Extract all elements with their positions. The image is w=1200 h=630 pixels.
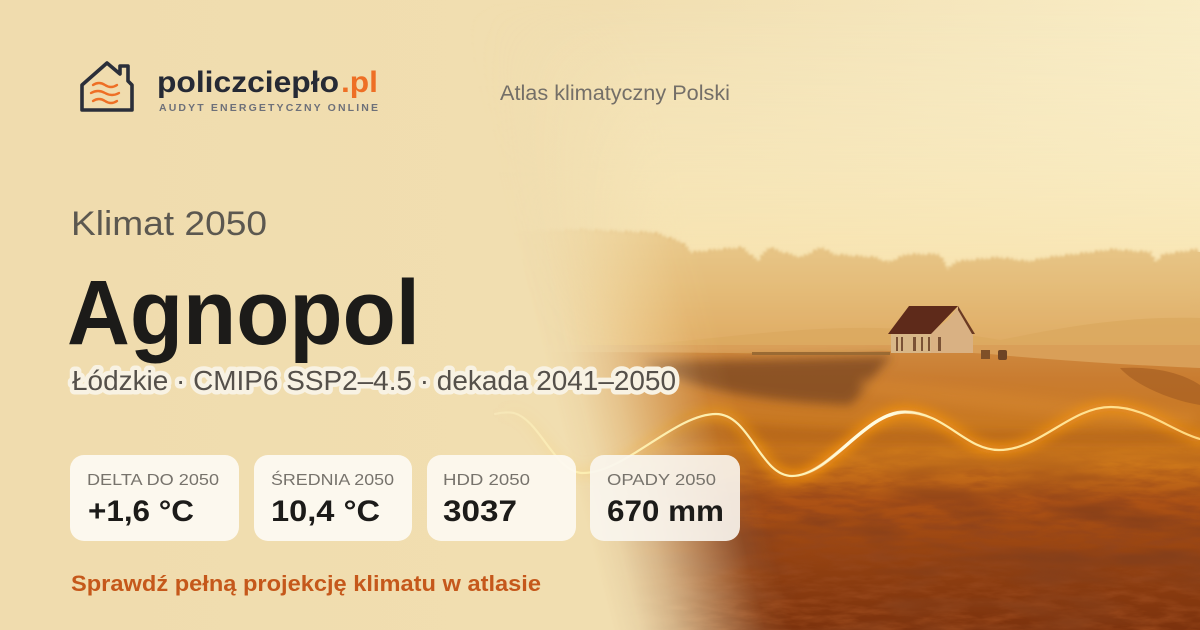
glowing wave line	[495, 407, 1200, 476]
heading: Klimat 2050: Klimat 2050	[71, 205, 267, 243]
subtitle with halo: Łódzkie · CMIP6 SSP2–4.5 · dekada 2041–2050	[72, 365, 676, 396]
stat card: HDD: 3037	[443, 495, 517, 528]
site label: Atlas klimatyczny Polski	[500, 82, 730, 105]
wordmark: policzciepło	[157, 66, 339, 99]
tagline: AUDYT ENERGETYCZNY ONLINE	[159, 102, 378, 114]
stat card: delta: DELTA DO 2050	[87, 472, 219, 489]
background sky	[639, 0, 1200, 264]
title: Agnopol: Agnopol	[67, 262, 420, 364]
mid-ground plain	[578, 345, 1200, 368]
stat card: average: ŚREDNIA 2050	[271, 470, 394, 489]
stat card: precipitation	[590, 455, 740, 541]
icon: house on the hill	[752, 306, 1007, 360]
stat card: delta	[70, 455, 239, 541]
forest right edge filler	[1196, 252, 1200, 345]
grass texture	[688, 452, 1200, 630]
logo	[82, 63, 378, 114]
stat card: HDD: HDD 2050	[443, 472, 530, 489]
landscape photo: fields, forest	[565, 228, 1200, 630]
shadow on the dune	[640, 356, 892, 405]
forest silhouette	[565, 228, 1200, 345]
stat card: delta: +1,6 °C	[88, 495, 194, 528]
stat card: average	[254, 455, 412, 541]
distant hills	[786, 318, 1200, 332]
stat card: precipitation: 670 mm	[607, 495, 724, 528]
land base	[577, 351, 1200, 630]
icon: house with heat waves	[82, 63, 132, 110]
stat card: average: 10,4 °C	[271, 495, 380, 528]
stat card: precipitation: OPADY 2050	[607, 472, 716, 489]
stat card: HDD	[427, 455, 576, 541]
call to action: Sprawdź pełną projekcję klimatu w atlasie	[71, 571, 541, 596]
right-hand dune shadow	[1120, 368, 1200, 405]
logo: .pl	[341, 66, 378, 99]
